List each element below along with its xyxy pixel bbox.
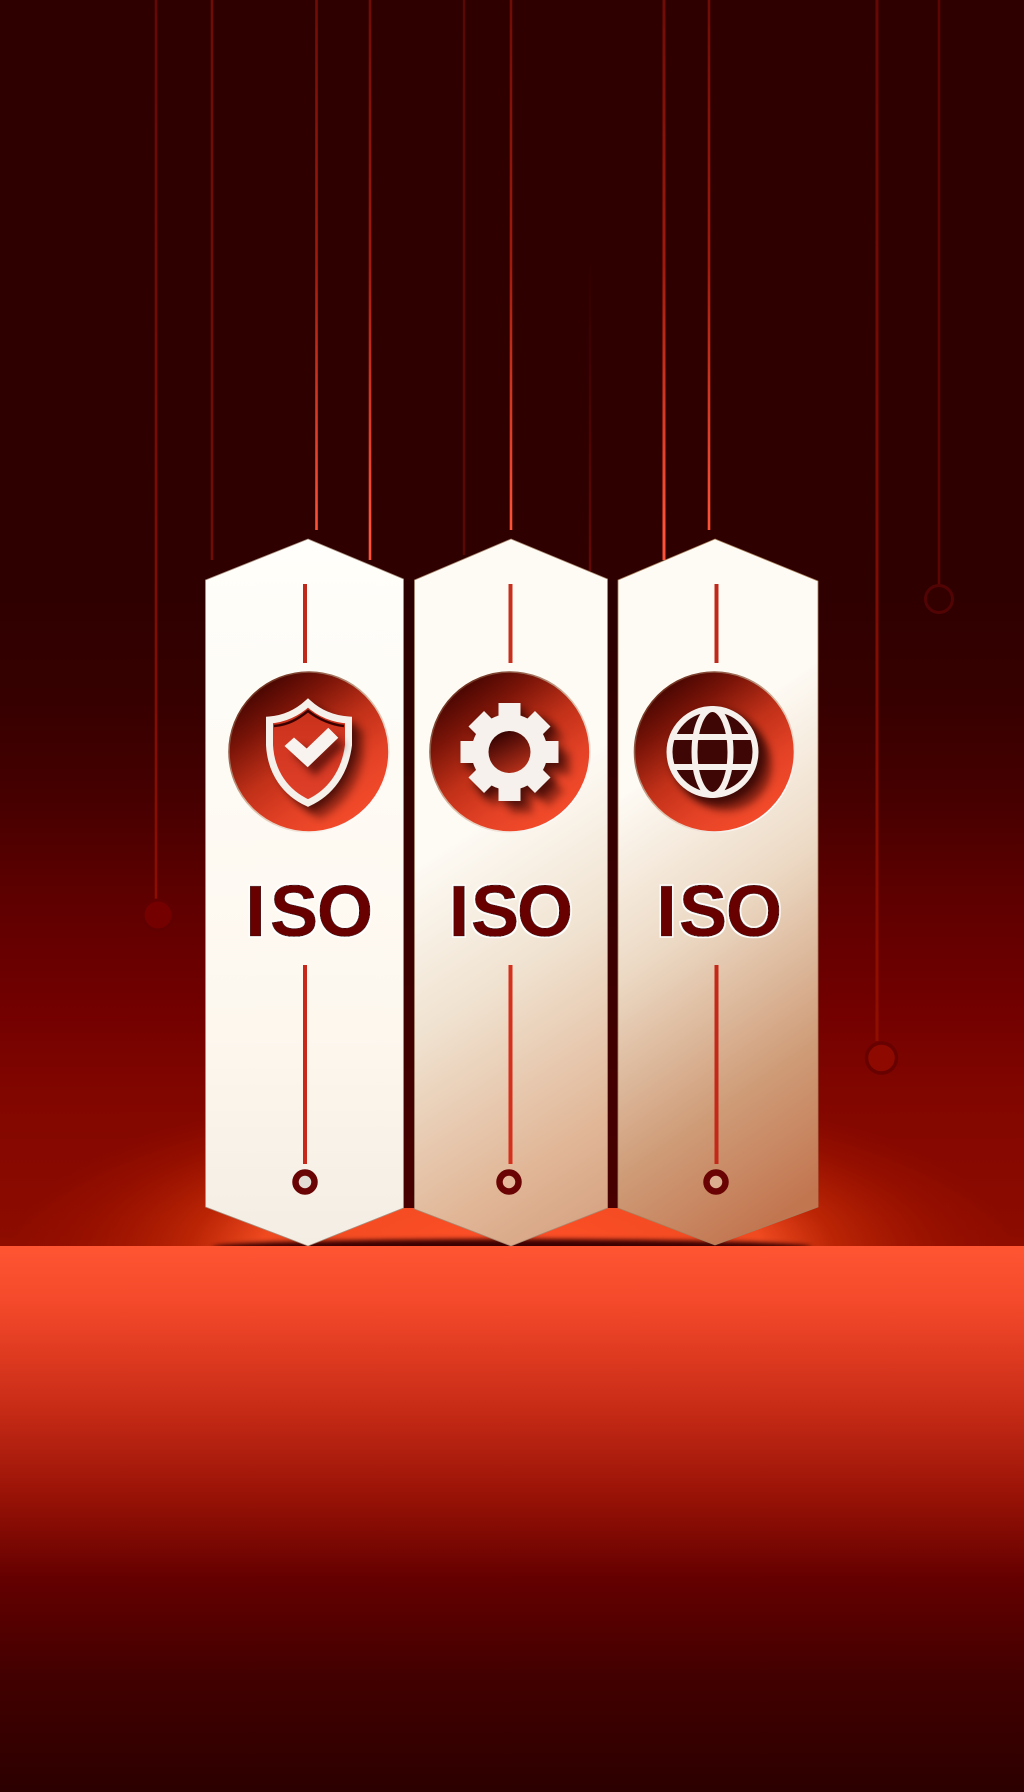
panel 3 bottom ring [706,1172,726,1192]
floor [0,1246,1024,1792]
background circle right top [926,586,952,612]
panel 3 top line [714,584,718,663]
icon: shield with check [270,703,348,803]
panel 2 icon circle [430,672,590,832]
panel 3 icon circle [634,672,794,832]
panel 3 shape [618,539,818,1245]
background circle right bottom [866,1043,896,1073]
panel 1: shield [206,539,404,1246]
panel 1 ISO label: ISO [246,872,373,952]
panel 2 bottom ring [500,1172,518,1192]
panel 1 top line [303,584,307,663]
panel 3 bottom line [714,965,718,1164]
dark gaps between panels [403,580,619,1208]
panel 1 shape [206,539,404,1246]
icon: gear [460,703,558,801]
panel 3 ISO label: ISO [656,872,782,952]
panel 2 bottom line [508,965,512,1164]
panel 2 top line [508,584,512,663]
hanging background lines [156,0,939,1041]
background circle left [143,900,173,930]
floor shadow under panels [210,1235,814,1246]
panel 3: globe [618,539,818,1245]
background wall [0,0,1024,1246]
icon: globe [670,709,756,795]
panel 2 ISO label: ISO [449,872,573,952]
panel 1 bottom ring [296,1172,314,1192]
panel 2: gear [414,539,608,1246]
panel 1 bottom line [303,965,307,1164]
panel 2 shape [414,539,608,1246]
panel 1 icon circle [229,672,389,832]
